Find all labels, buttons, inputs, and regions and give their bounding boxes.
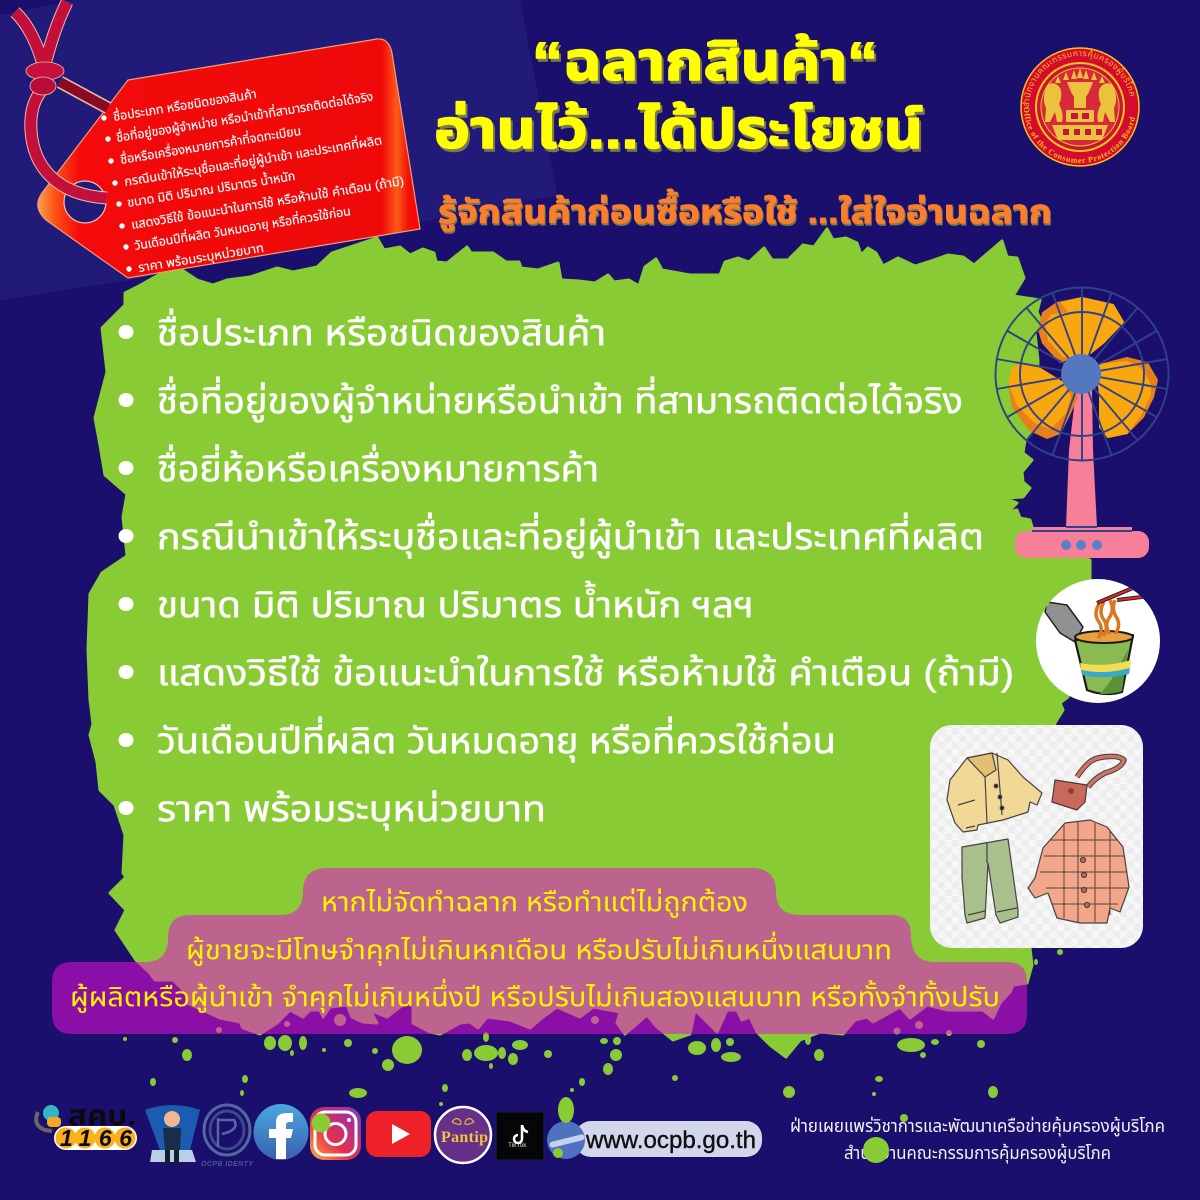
cup xyxy=(1075,635,1133,694)
fan base xyxy=(1032,527,1132,532)
tag text list xyxy=(112,85,405,275)
list text: กรณีนำเข้าให้ระบุชื่อและที่อยู่ผู้นำเข้า และประเทศที่ผลิต xyxy=(157,512,984,558)
logo: 1166 hotline: สคบ. xyxy=(68,1100,136,1131)
list text: ชื่อประเภท หรือชนิดของสินค้า xyxy=(157,308,606,353)
lighter panel behind tag xyxy=(0,0,557,300)
string xyxy=(15,2,108,198)
logo: facebook xyxy=(254,1104,308,1160)
logo: tiktok xyxy=(496,1112,544,1160)
noodles xyxy=(1096,600,1119,638)
tag hole xyxy=(64,181,106,223)
main bullet list xyxy=(118,308,1014,830)
clothes card xyxy=(930,725,1143,948)
logo: youtube xyxy=(366,1111,431,1157)
tag text list: ราคา พร้อมระบุหน่วยบาท xyxy=(137,241,265,275)
tag text list: กรณีนเข้าให้ระบุชื่อและที่อยู่ผู้นำเข้า และประเทศที่ผลิต xyxy=(123,131,383,189)
penalty notice banner xyxy=(52,868,1027,1034)
footer organisation text xyxy=(790,1116,1165,1165)
logo: mascot xyxy=(145,1105,200,1164)
title: อ่านไว้...ได้ประโยชน์ xyxy=(434,100,923,160)
tag text list: แสดงวิธีใช้ ข้อแนะนำในการใช้ หรือห้ามใช้ คำเตือน (ถ้ามี) xyxy=(130,174,405,232)
tag body xyxy=(38,39,420,278)
green paint splats over footer xyxy=(312,1097,908,1163)
price tag illustration xyxy=(15,2,420,278)
list text: ขนาด มิติ ปริมาณ ปริมาตร น้ำหนัก ฯลฯ xyxy=(157,580,754,625)
consumer protection board seal xyxy=(1020,47,1140,167)
icon: green trousers xyxy=(962,839,1018,923)
logo: 1166 hotline xyxy=(36,1100,137,1151)
icon: instant noodle cup xyxy=(1036,579,1160,703)
penalty notice banner: หากไม่จัดทำฉลาก หรือทำแต่ไม่ถูกต้อง xyxy=(321,887,748,918)
logo: pantip: Pantip xyxy=(441,1129,488,1146)
website badge: www.ocpb.go.th xyxy=(585,1127,756,1154)
footer organisation text: สำนักงานคณะกรรมการคุ้มครองผู้บริโภค xyxy=(844,1143,1111,1165)
subtitle: รู้จักสินค้าก่อนซื้อหรือใช้ ...ใส่ใจอ่านฉลาก xyxy=(438,188,1052,232)
knot xyxy=(26,62,64,80)
logo: tiktok: TikTok xyxy=(508,1142,527,1149)
logo: pantip xyxy=(435,1107,491,1163)
icon: electric fan xyxy=(996,288,1168,558)
tag text list: ชื่อหรือเครื่องหมายการค้าที่จดทะเบียน xyxy=(119,122,302,167)
penalty notice banner: ผู้ผลิตหรือผู้นำเข้า จำคุกไม่เกินหนึ่งปี หรือปรับไม่เกินสองแสนบาท หรือทั้งจำทั้งปรับ xyxy=(70,978,1000,1013)
footer organisation text: ฝ่ายเผยแพร่วิชาการและพัฒนาเครือข่ายคุ้มครองผู้บริโภค xyxy=(790,1116,1165,1138)
title xyxy=(434,32,923,160)
tag text list: ชื่อประเภท หรือชนิดของสินค้า xyxy=(112,85,258,124)
bullet dots xyxy=(118,325,134,815)
green paint splash panel xyxy=(88,229,1090,1106)
list text: ราคา พร้อมระบุหน่วยบาท xyxy=(157,788,546,830)
logo: 1166 hotline: 1166 xyxy=(60,1125,132,1151)
list text: ชื่อยี่ห้อหรือเครื่องหมายการค้า xyxy=(157,444,599,489)
tag text list: วันเดือนปีที่ผลิต วันหมดอายุ หรือที่ควรใช้ก่อน xyxy=(133,202,352,253)
tag bullet dots xyxy=(101,115,132,272)
penalty notice banner: ผู้ขายจะมีโทษจำคุกไม่เกินหกเดือน หรือปรับไม่เกินหนึ่งแสนบาท xyxy=(186,931,892,966)
website badge xyxy=(547,1121,762,1159)
lid xyxy=(1045,602,1083,642)
list text: แสดงวิธีใช้ ข้อแนะนำในการใช้ หรือห้ามใช้ คำเตือน (ถ้ามี) xyxy=(157,652,1014,693)
fan blades xyxy=(1009,298,1157,438)
footer logos xyxy=(36,1100,762,1168)
logo: OCPB emblem xyxy=(201,1105,254,1168)
logo: instagram xyxy=(310,1107,361,1160)
seal ring text: สำนักงานคณะกรรมการคุ้มครองผู้บริโภค xyxy=(1022,50,1134,107)
icon: shoulder bag xyxy=(1052,756,1124,810)
tag text list: ชื่อที่อยู่ของผู้จำหน่าย หรือนำเข้าที่สามารถติดต่อได้จริง xyxy=(115,88,374,145)
fan hub xyxy=(1061,354,1101,394)
icon: plaid shirt xyxy=(1028,820,1129,923)
icon: cardigan xyxy=(947,753,1042,832)
fan stem xyxy=(1066,390,1097,527)
list text xyxy=(157,308,1014,830)
list text: ชื่อที่อยู่ของผู้จำหน่ายหรือนำเข้า ที่สามารถติดต่อได้จริง xyxy=(157,376,963,422)
list text: วันเดือนปีที่ผลิต วันหมดอายุ หรือที่ควรใช้ก่อน xyxy=(157,716,836,762)
seal gold emblem xyxy=(1044,68,1116,140)
tag text list: ขนาด มิติ ปริมาณ ปริมาตร น้ำหนัก xyxy=(126,167,296,210)
consumer protection board seal: Office of the Consumer Protection Board xyxy=(1024,107,1135,164)
chopsticks xyxy=(1096,588,1144,605)
fan guard xyxy=(996,288,1168,460)
title: “ฉลากสินค้า“ xyxy=(532,32,878,92)
logo: OCPB emblem: OCPB IDENTY xyxy=(201,1161,254,1168)
